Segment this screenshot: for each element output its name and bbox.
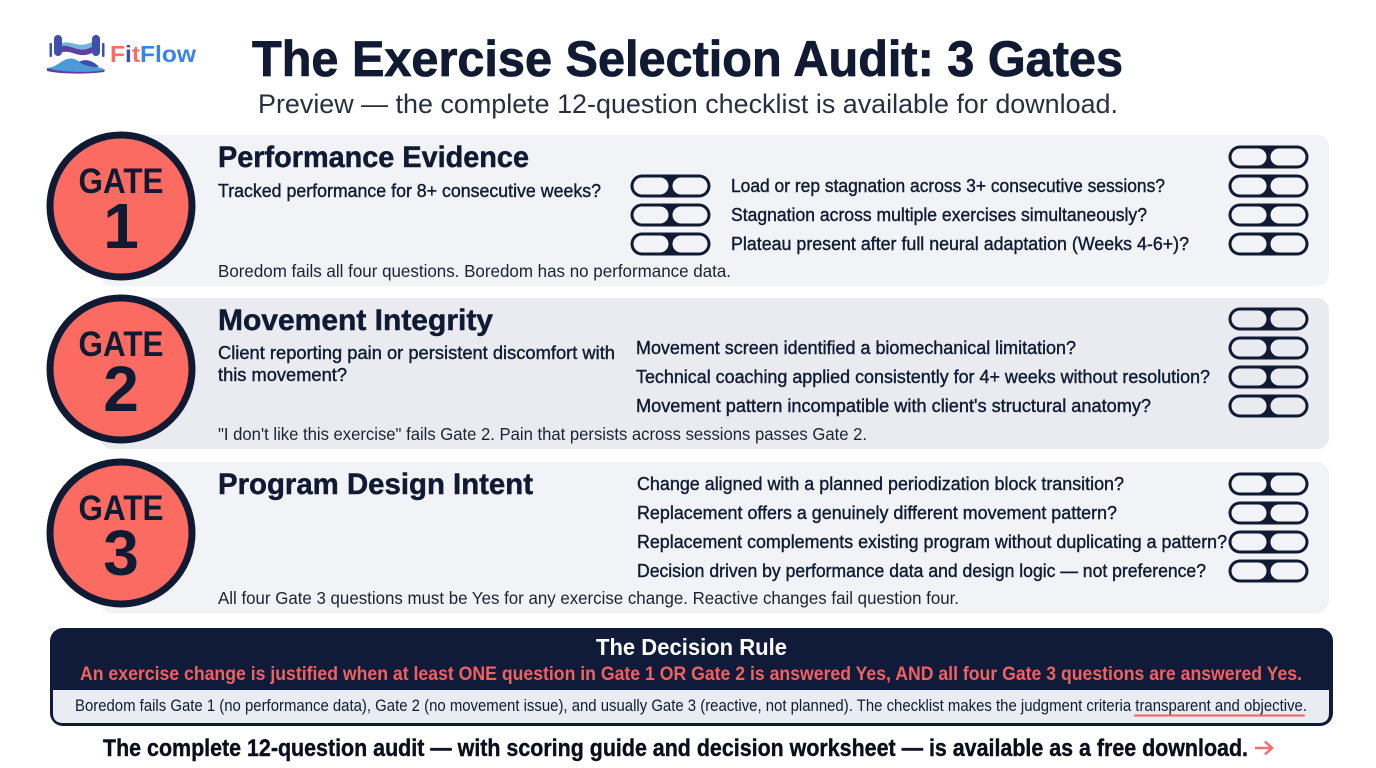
questions right: Change aligned with a planned periodization block transition?: [637, 473, 1124, 494]
note: All four Gate 3 questions must be Yes for any exercise change. Reactive changes fail question four.: [218, 588, 959, 608]
panel: gate 2 movement integrity: [50, 298, 1329, 449]
heading: Performance Evidence: [218, 141, 529, 174]
toggles right: [1228, 472, 1308, 582]
decision rule statement: An exercise change is justified when at least ONE question in Gate 1 OR Gate 2 is answered Yes, AND all four Gate 3 questions are answered Yes.: [80, 664, 1302, 685]
badge: gate 2: 2: [103, 353, 139, 425]
questions right: Replacement complements existing program without duplicating a pattern?: [637, 531, 1227, 552]
note: "I don't like this exercise" fails Gate 2. Pain that persists across sessions passes Gate 2.: [218, 424, 867, 444]
badge: gate 1: GATE: [78, 162, 164, 201]
panel: gate 3 program design intent: [50, 462, 1329, 613]
badge: gate 1: 1: [103, 190, 139, 262]
note: Boredom fails all four questions. Boredom has no performance data.: [218, 261, 731, 281]
question left: Client reporting pain or persistent discomfort with: [218, 342, 615, 363]
toggles right: [1228, 308, 1308, 418]
questions right: Technical coaching applied consistently for 4+ weeks without resolution?: [636, 366, 1210, 387]
question left: this movement?: [218, 364, 347, 385]
panel: gate 1 performance evidence: [50, 135, 1329, 286]
badge: gate 3: GATE: [78, 489, 164, 528]
toggles left: [630, 174, 710, 256]
badge: gate 1: [50, 135, 192, 277]
questions right: Load or rep stagnation across 3+ consecutive sessions?: [731, 175, 1165, 196]
questions right: Decision driven by performance data and design logic — not preference?: [637, 560, 1206, 581]
icon: dumbbell with wave: [47, 35, 105, 74]
arrow: [1255, 742, 1272, 754]
questions right: Movement pattern incompatible with client's structural anatomy?: [636, 395, 1151, 416]
question left: Tracked performance for 8+ consecutive weeks?: [218, 180, 601, 201]
decision rule heading: The Decision Rule: [596, 634, 787, 660]
questions right: [731, 175, 1189, 254]
panel: the decision rule: [50, 628, 1333, 726]
questions right: Plateau present after full neural adaptation (Weeks 4-6+)?: [731, 233, 1189, 254]
questions right: Replacement offers a genuinely different movement pattern?: [637, 502, 1117, 523]
highlight underline: [1134, 714, 1305, 716]
badge: gate 2: GATE: [78, 325, 164, 364]
questions right: Movement screen identified a biomechanical limitation?: [636, 337, 1076, 358]
badge: gate 3: 3: [103, 517, 139, 589]
badge: gate 2: [50, 298, 192, 440]
title: The Exercise Selection Audit: 3 Gates: [252, 31, 1123, 87]
wordmark: FitFlow: [110, 41, 197, 67]
badge: gate 3: [50, 462, 192, 604]
explanation strip: [53, 690, 1329, 723]
question left: [218, 342, 615, 385]
questions right: [636, 337, 1210, 416]
questions right: [637, 473, 1227, 581]
logo: FitFlow: [47, 35, 197, 74]
toggles right: [1228, 146, 1308, 256]
heading: Movement Integrity: [218, 304, 493, 337]
questions right: Stagnation across multiple exercises simultaneously?: [731, 204, 1147, 225]
subtitle: Preview — the complete 12-question checklist is available for download.: [258, 89, 1118, 119]
heading: Program Design Intent: [218, 468, 533, 501]
call to action: The complete 12-question audit — with scoring guide and decision worksheet — is available as a free download.: [103, 735, 1248, 762]
